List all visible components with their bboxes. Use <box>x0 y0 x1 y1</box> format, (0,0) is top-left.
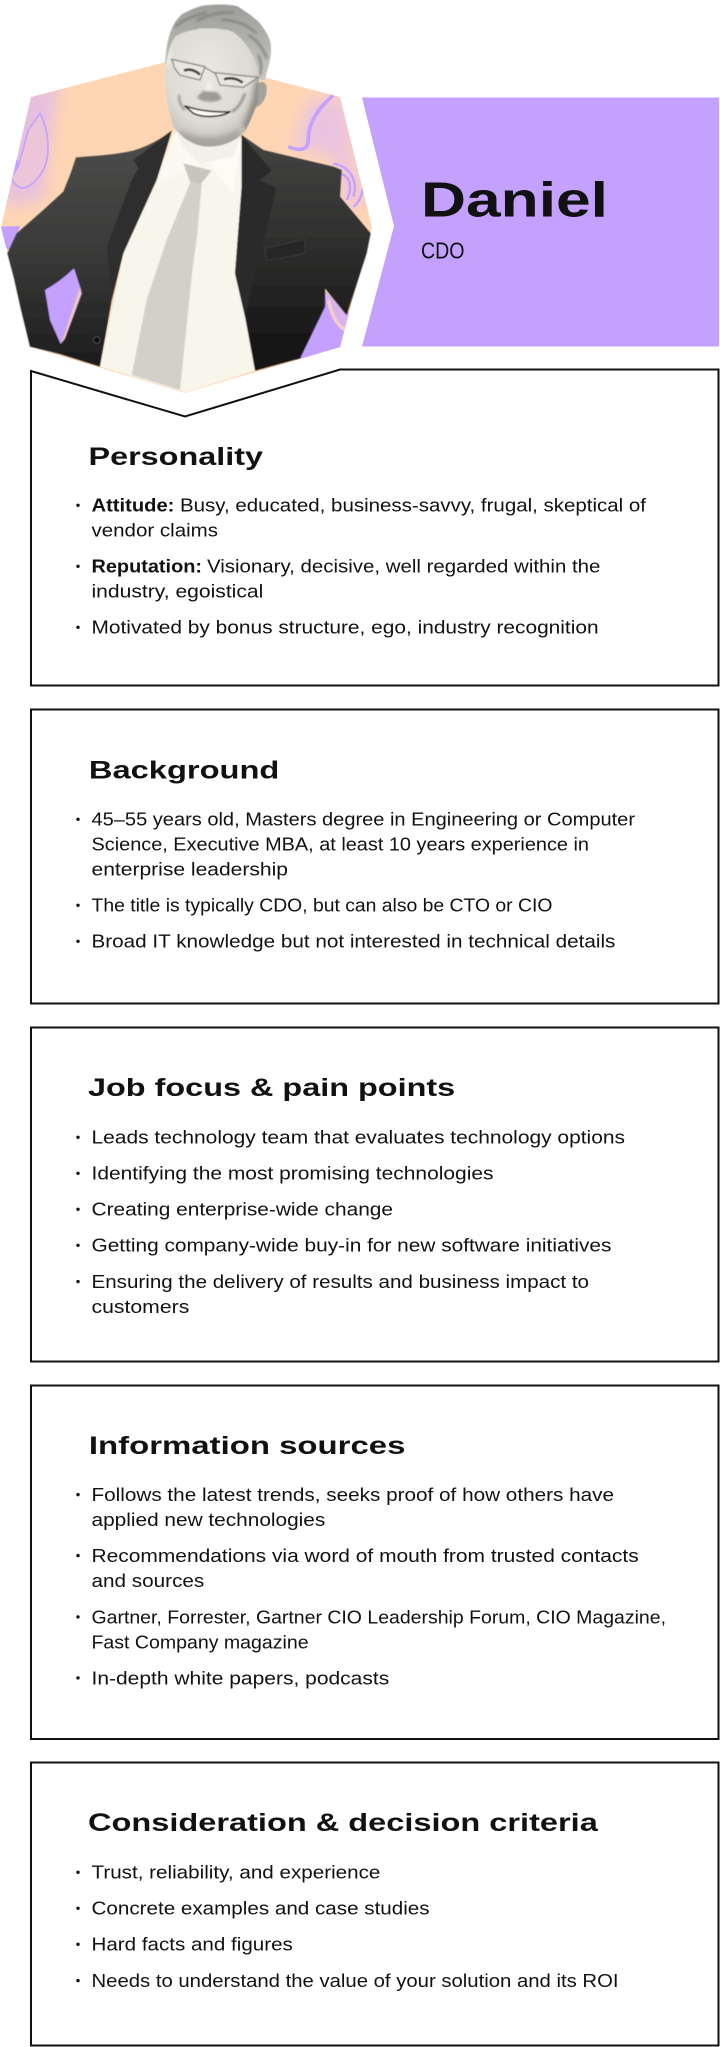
list: Ensuring the delivery of results and business impact to <box>92 1271 589 1292</box>
list <box>76 1862 619 1991</box>
list: Motivated by bonus structure, ego, industry recognition <box>92 617 599 638</box>
lapels <box>107 131 172 300</box>
list: In-depth white papers, podcasts <box>92 1667 389 1688</box>
list: applied new technologies <box>92 1509 325 1530</box>
heading: Background <box>89 756 279 784</box>
list <box>76 1484 666 1688</box>
heading: Personality <box>88 443 263 471</box>
tie <box>132 182 202 390</box>
ear <box>256 82 267 107</box>
button <box>93 337 100 343</box>
list: Hard facts and figures <box>92 1934 293 1955</box>
eyes <box>184 70 243 83</box>
jacket left <box>7 131 172 367</box>
list <box>76 809 635 952</box>
list: Busy, educated, business-savvy, frugal, skeptical of <box>180 495 647 516</box>
name: Daniel <box>421 174 608 228</box>
panel: personality <box>31 370 718 686</box>
panel: information sources <box>31 1386 718 1739</box>
list: Fast Company magazine <box>92 1631 309 1652</box>
list: vendor claims <box>92 520 218 541</box>
panel: background <box>31 710 718 1004</box>
facial shading <box>163 37 267 150</box>
pocket <box>265 239 305 261</box>
heading: Information sources <box>89 1432 405 1460</box>
list: 45–55 years old, Masters degree in Engineering or Computer <box>92 809 635 830</box>
list: Visionary, decisive, well regarded within the <box>207 556 600 577</box>
list: Reputation: <box>92 556 202 577</box>
list: Science, Executive MBA, at least 10 years experience in <box>92 834 589 855</box>
collar <box>157 133 200 183</box>
list: Leads technology team that evaluates technology options <box>92 1127 625 1148</box>
list: industry, egoistical <box>92 581 263 602</box>
octagon marbled background <box>0 50 380 400</box>
list: and sources <box>92 1570 204 1591</box>
list: Trust, reliability, and experience <box>92 1862 380 1883</box>
list: customers <box>92 1296 189 1317</box>
jacket right <box>235 135 371 371</box>
list: The title is typically CDO, but can also be CTO or CIO <box>92 895 552 916</box>
hair <box>165 5 271 80</box>
role: CDO <box>421 237 464 263</box>
list: Broad IT knowledge but not interested in technical details <box>92 931 615 952</box>
shirt <box>100 132 255 393</box>
face <box>165 28 259 147</box>
list: Identifying the most promising technologies <box>92 1163 493 1184</box>
list: Needs to understand the value of your solution and its ROI <box>92 1970 618 1991</box>
heading: Consideration & decision criteria <box>88 1809 599 1837</box>
left arm hole <box>45 268 80 344</box>
portrait: Daniel on marbled octagon <box>0 5 380 400</box>
list <box>76 495 647 638</box>
list <box>76 1127 625 1317</box>
list: Concrete examples and case studies <box>92 1898 430 1919</box>
glasses <box>172 59 258 87</box>
neck <box>173 127 242 163</box>
man photo <box>7 5 371 393</box>
list: Recommendations via word of mouth from trusted contacts <box>92 1545 639 1566</box>
mouth <box>185 106 230 116</box>
heading: Job focus & pain points <box>88 1074 455 1102</box>
panel: consideration and decision criteria <box>31 1762 718 2046</box>
list: Creating enterprise-wide change <box>92 1199 393 1220</box>
list: Attitude: <box>92 495 174 516</box>
list: enterprise leadership <box>92 859 288 880</box>
banner shape <box>362 98 719 346</box>
panel: job focus and pain points <box>31 1028 718 1362</box>
list: Getting company-wide buy-in for new software initiatives <box>92 1235 611 1256</box>
list: Follows the latest trends, seeks proof of how others have <box>92 1484 614 1505</box>
list: Gartner, Forrester, Gartner CIO Leadership Forum, CIO Magazine, <box>92 1606 666 1627</box>
name banner <box>362 98 719 346</box>
